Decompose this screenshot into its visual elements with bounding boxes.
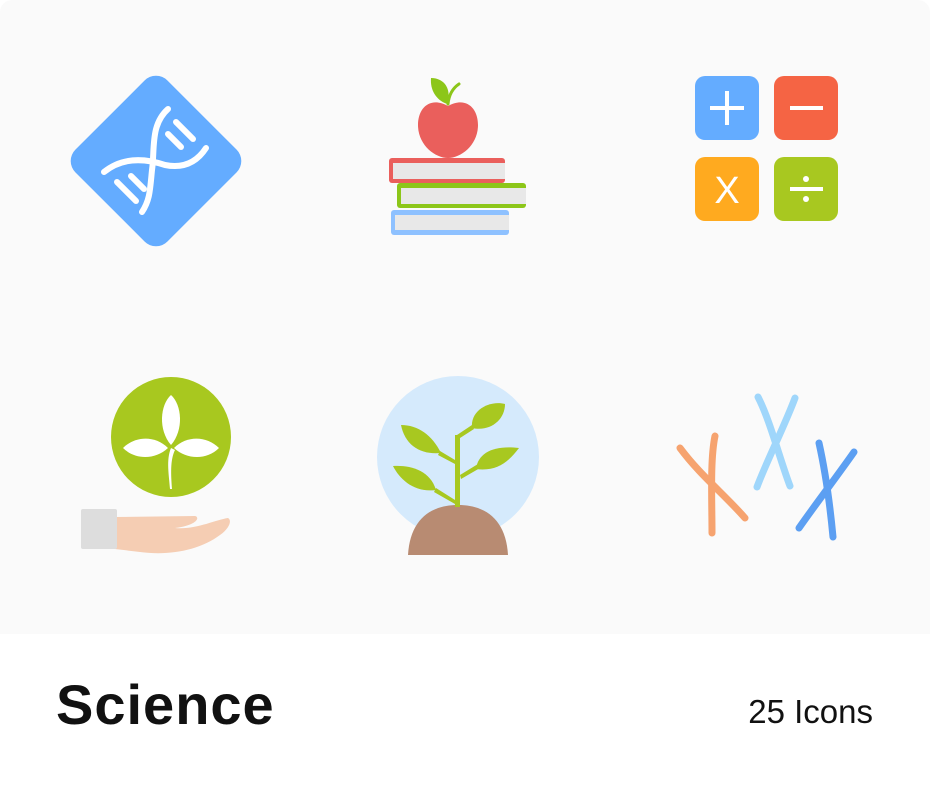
title: Science — [56, 673, 275, 736]
icon: math operators: X — [714, 170, 740, 212]
icon: hand with plant — [81, 377, 231, 553]
icon: DNA — [64, 69, 248, 253]
icon: math operators — [695, 76, 838, 221]
icon count: 25 Icons — [748, 693, 873, 730]
icon: chromosomes — [680, 397, 854, 537]
icon: books and apple — [389, 78, 526, 235]
icon: growing plant — [377, 376, 539, 555]
